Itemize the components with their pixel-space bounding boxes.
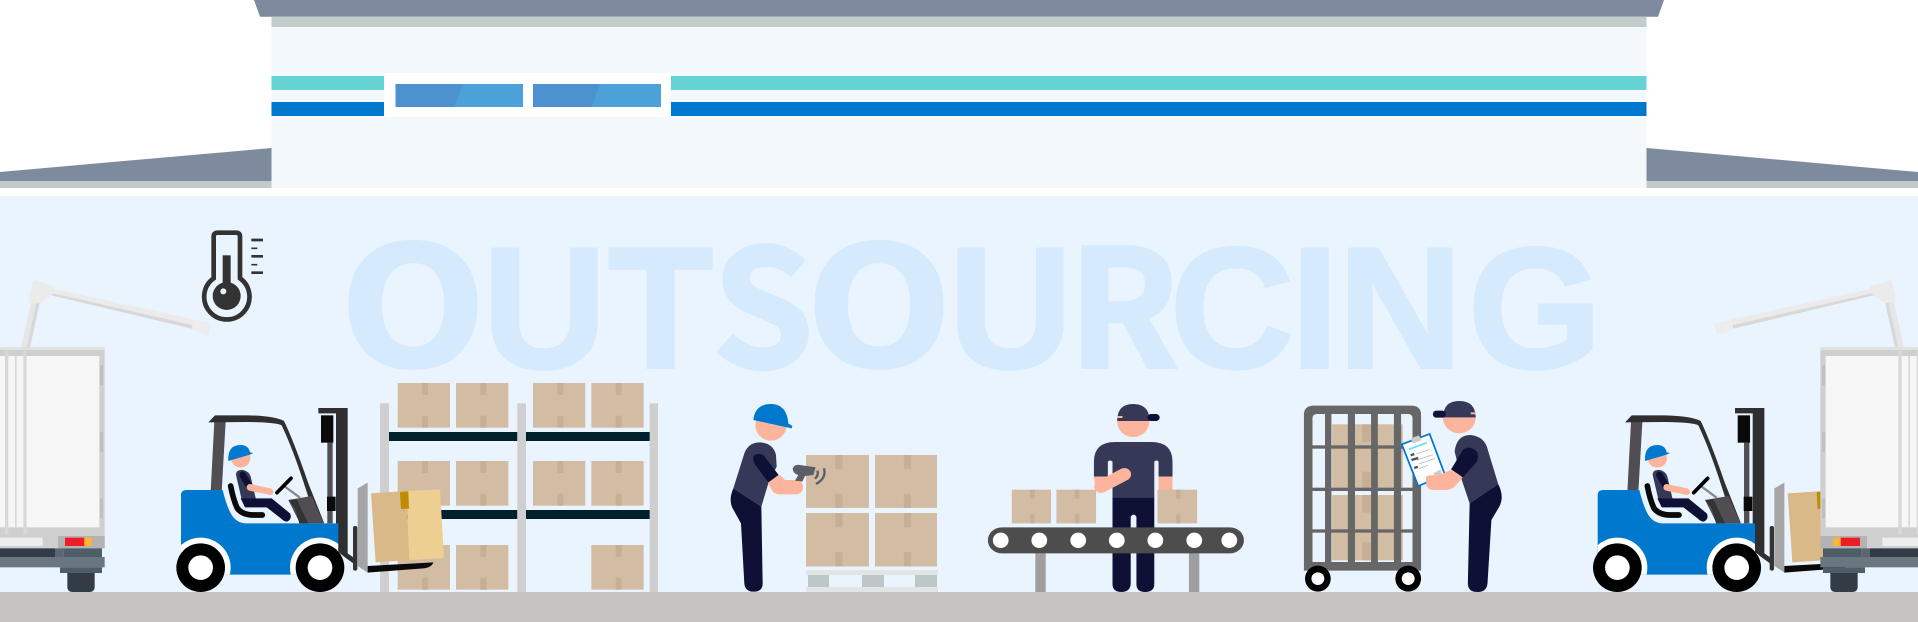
worker at conveyor bbox=[988, 404, 1244, 592]
left truck bbox=[0, 281, 211, 592]
title watermark: I bbox=[1291, 212, 1339, 404]
floor bbox=[0, 592, 1918, 622]
shelf beams bbox=[389, 432, 658, 519]
shelf posts bbox=[380, 403, 658, 592]
warehouse building bbox=[0, 0, 1918, 188]
worker arms bbox=[1094, 474, 1172, 493]
clipboard bbox=[1402, 434, 1445, 486]
right truck bbox=[1714, 281, 1918, 592]
window left bbox=[396, 84, 523, 107]
conveyor belt bbox=[988, 527, 1244, 553]
cage frame bbox=[1304, 406, 1421, 571]
window right bbox=[533, 84, 661, 107]
title watermark: T bbox=[608, 212, 713, 404]
worker legs bbox=[1112, 497, 1154, 592]
stacked boxes on pallet bbox=[806, 455, 938, 592]
title watermark: N bbox=[1338, 212, 1462, 404]
legs bbox=[1468, 484, 1502, 592]
blue stripe bbox=[272, 102, 1646, 116]
title watermark: C bbox=[1170, 212, 1294, 404]
window panel bbox=[384, 73, 671, 117]
pallet bbox=[806, 570, 938, 592]
storage shelves with boxes bbox=[380, 383, 658, 592]
icon: thermometer bbox=[204, 233, 263, 319]
roof bbox=[254, 0, 1664, 17]
cage boxes bbox=[1332, 424, 1403, 560]
title watermark: U bbox=[482, 212, 607, 404]
worker head and cap bbox=[1117, 404, 1160, 437]
right wing roof bbox=[1646, 148, 1918, 188]
facade bbox=[272, 27, 1646, 188]
title watermark: O bbox=[340, 208, 486, 408]
conveyor legs bbox=[1035, 553, 1199, 592]
title watermark: U bbox=[948, 212, 1073, 404]
worker with scanner bbox=[731, 404, 825, 592]
left forklift bbox=[171, 408, 444, 598]
teal stripe bbox=[272, 76, 1646, 90]
roll cage with boxes bbox=[1304, 406, 1421, 592]
title watermark: S bbox=[712, 178, 814, 414]
right forklift bbox=[1587, 408, 1861, 598]
worker with clipboard bbox=[1402, 401, 1502, 592]
torso bbox=[1455, 435, 1498, 503]
forearm and sleeve bbox=[1426, 448, 1478, 490]
title watermark: G bbox=[1468, 212, 1602, 404]
eave band bbox=[272, 17, 1646, 27]
head and cap bbox=[1433, 401, 1476, 433]
conveyor boxes bbox=[1012, 490, 1197, 523]
cage wheels bbox=[1305, 566, 1421, 592]
left wing roof bbox=[0, 148, 272, 188]
shelf boxes bbox=[398, 383, 644, 590]
worker torso bbox=[1094, 442, 1172, 497]
title watermark: R bbox=[1068, 178, 1179, 414]
box stack bbox=[806, 455, 937, 566]
warehouse interior background bbox=[0, 196, 1918, 592]
title watermark: O bbox=[806, 208, 952, 408]
